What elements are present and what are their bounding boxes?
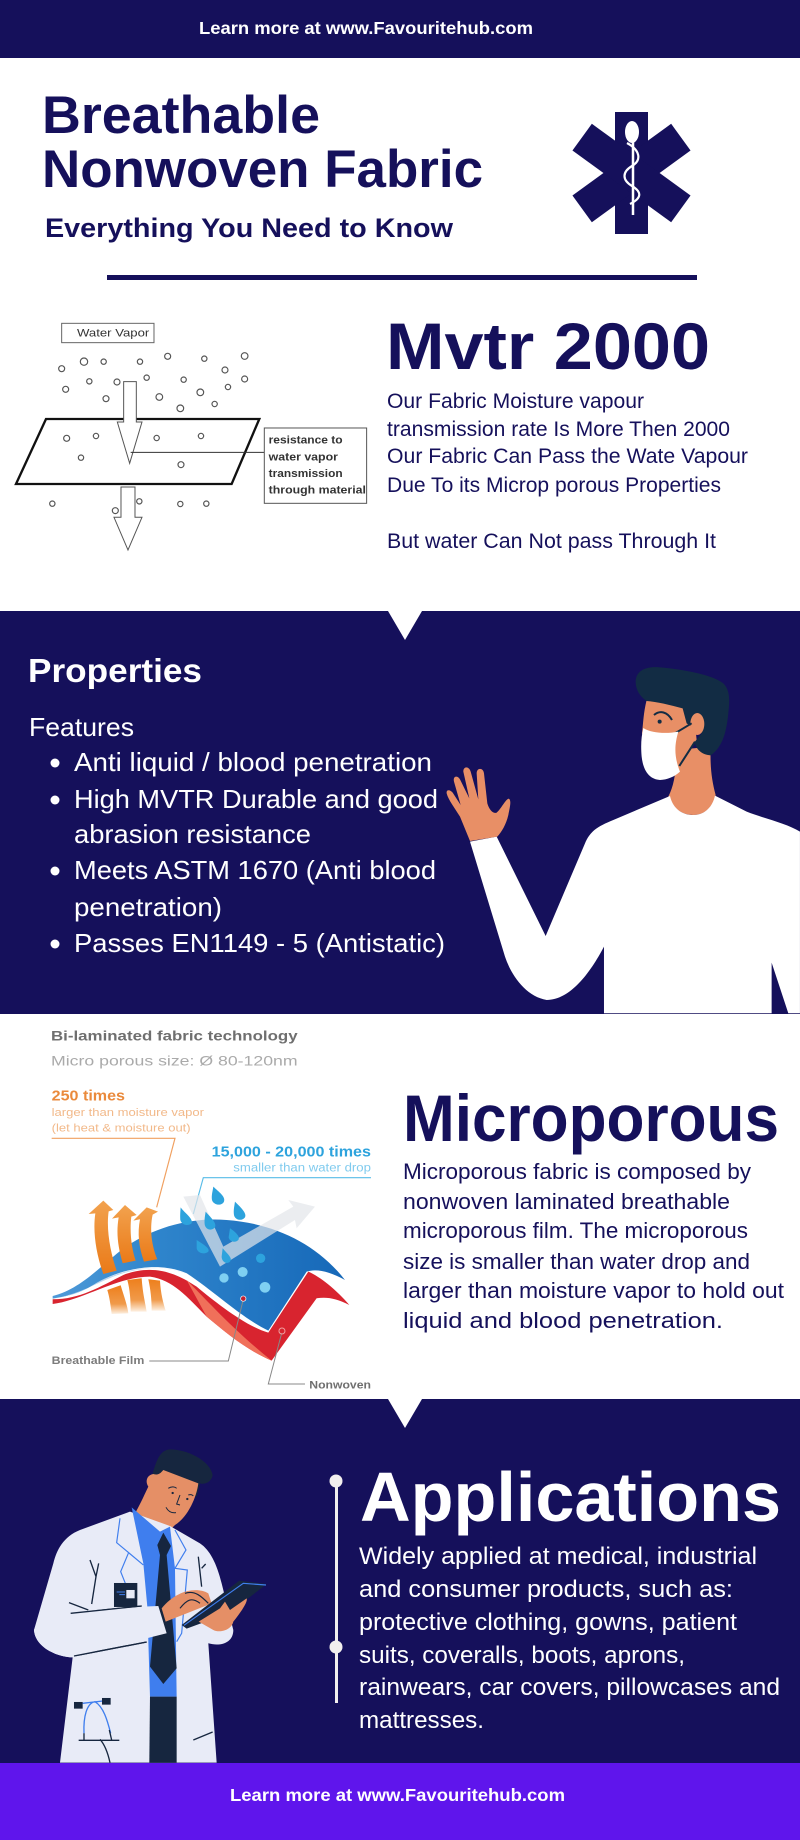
mask straps [675, 723, 695, 766]
title [42, 86, 483, 199]
head and neck [135, 1470, 198, 1533]
callout: 250 times: 250 times [52, 1089, 125, 1105]
illustration: doctor with tablet [34, 1449, 267, 1763]
neck [668, 747, 716, 815]
face [642, 700, 697, 773]
ear [690, 713, 704, 735]
callout: water drop [193, 1145, 371, 1214]
text: features label: Features [29, 712, 134, 742]
shirt [132, 1507, 177, 1697]
top banner link text: Learn more at www.Favouritehub.com [199, 18, 533, 38]
shirt [470, 796, 800, 1013]
label: resistance: transmission [269, 468, 343, 480]
tablet [182, 1581, 267, 1629]
text: microporous description: nonwoven laminated breathable [403, 1189, 730, 1214]
features list: Meets ASTM 1670 (Anti blood [74, 855, 436, 885]
icon: star of life [572, 112, 691, 234]
lower heat stripes [107, 1278, 166, 1314]
bottom banner link text: Learn more at www.Favouritehub.com [230, 1785, 565, 1805]
vapor particles [50, 353, 248, 514]
callout: 250 times: (let heat & moisture out) [52, 1123, 191, 1135]
title: Breathable [42, 86, 320, 145]
coat seams [69, 1557, 213, 1740]
label: resistance: resistance to [269, 434, 343, 446]
illustration: man with mask waving [447, 667, 800, 1013]
diagram: water vapor through material [16, 323, 367, 550]
orange heat arrows [89, 1201, 158, 1274]
label: nonwoven: Nonwoven [309, 1379, 371, 1391]
text: microporous description: size is smaller than water drop and [403, 1249, 750, 1274]
text: applications description: Widely applied at medical, industrial [359, 1543, 757, 1570]
label: resistance: through material [269, 485, 366, 497]
heading: properties: Properties [28, 652, 202, 689]
diagram title: Bi-laminated fabric technology [51, 1028, 298, 1044]
label: resistance [264, 428, 367, 503]
label: breathable film: Breathable Film [52, 1355, 144, 1367]
heading: mvtr 2000: Mvtr 2000 [386, 309, 710, 383]
eye [654, 712, 672, 720]
face detail [166, 1487, 193, 1513]
stethoscope [74, 1698, 119, 1763]
pocket badge [114, 1583, 137, 1607]
text: mvtr description: Our Fabric Moisture vapour [387, 390, 644, 413]
text: microporous description: microporous film. The microporous [403, 1218, 748, 1243]
text: mvtr description: Our Fabric Can Pass the Wate Vapour [387, 445, 748, 468]
features list [50, 747, 445, 958]
lapels [117, 1518, 187, 1642]
check overlay [183, 1195, 315, 1267]
diagram: microporous fabric [51, 1028, 371, 1391]
hand [447, 767, 510, 841]
timeline decoration [330, 1474, 342, 1703]
top banner [0, 0, 800, 58]
features list: High MVTR Durable and good [74, 784, 438, 814]
diagram pore size: Micro porous size: Ø 80-120nm [51, 1053, 298, 1069]
hair [636, 667, 729, 755]
coat [34, 1512, 233, 1763]
text: mvtr description: transmission rate Is More Then 2000 [387, 418, 730, 441]
label: breathable film [52, 1296, 246, 1367]
text: mvtr description: But water Can Not pass Through It [387, 530, 716, 553]
water drops [180, 1187, 270, 1293]
label: water vapor [62, 323, 154, 343]
text: applications description [359, 1543, 780, 1734]
text: microporous description: Microporous fabric is composed by [403, 1159, 752, 1184]
bottom banner [0, 1763, 800, 1840]
hand on tablet [162, 1590, 212, 1622]
text: microporous description: liquid and blood penetration. [403, 1308, 723, 1333]
features list: Passes EN1149 - 5 (Antistatic) [74, 928, 445, 958]
mask [641, 728, 680, 780]
left hand [199, 1598, 247, 1631]
text: applications description: mattresses. [359, 1707, 484, 1734]
callout: water drop: 15,000 - 20,000 times [212, 1145, 371, 1161]
features list: abrasion resistance [74, 819, 311, 849]
text: applications description: rainwears, car covers, pillowcases and [359, 1674, 780, 1701]
label: water vapor: Water Vapor [77, 327, 150, 339]
fabric blue layer [53, 1219, 345, 1331]
features list: Anti liquid / blood penetration [74, 747, 432, 777]
panel: properties [0, 611, 800, 1014]
callout: 250 times [52, 1089, 204, 1207]
label: resistance: water vapor [268, 451, 339, 463]
text: mvtr description [387, 390, 748, 553]
text: mvtr description: Due To its Microp porous Properties [387, 474, 721, 497]
text: applications description: and consumer products, such as: [359, 1576, 733, 1603]
heading: microporous: Microporous [403, 1081, 779, 1155]
panel: applications [0, 1399, 800, 1763]
title: Nonwoven Fabric [42, 140, 483, 199]
features list: penetration) [74, 892, 222, 922]
callout: 250 times: larger than moisture vapor [52, 1107, 204, 1119]
heading: applications: Applications [360, 1458, 781, 1536]
subtitle: Everything You Need to Know [45, 213, 454, 243]
arrow: vapor into material [117, 382, 142, 463]
hair [147, 1449, 213, 1497]
text: microporous description [403, 1159, 785, 1333]
callout: water drop: smaller than water drop [233, 1160, 371, 1174]
right arm sleeve [34, 1606, 167, 1657]
label: nonwoven [268, 1328, 371, 1391]
text: applications description: protective clothing, gowns, patient [359, 1609, 737, 1636]
material sheet [16, 419, 259, 484]
text: applications description: suits, coveralls, boots, aprons, [359, 1642, 685, 1669]
fabric red layer [53, 1270, 349, 1361]
arrow: vapor out of material [114, 487, 142, 550]
text: microporous description: larger than moisture vapor to hold out [403, 1278, 785, 1303]
collar edges and tie [149, 1697, 177, 1763]
